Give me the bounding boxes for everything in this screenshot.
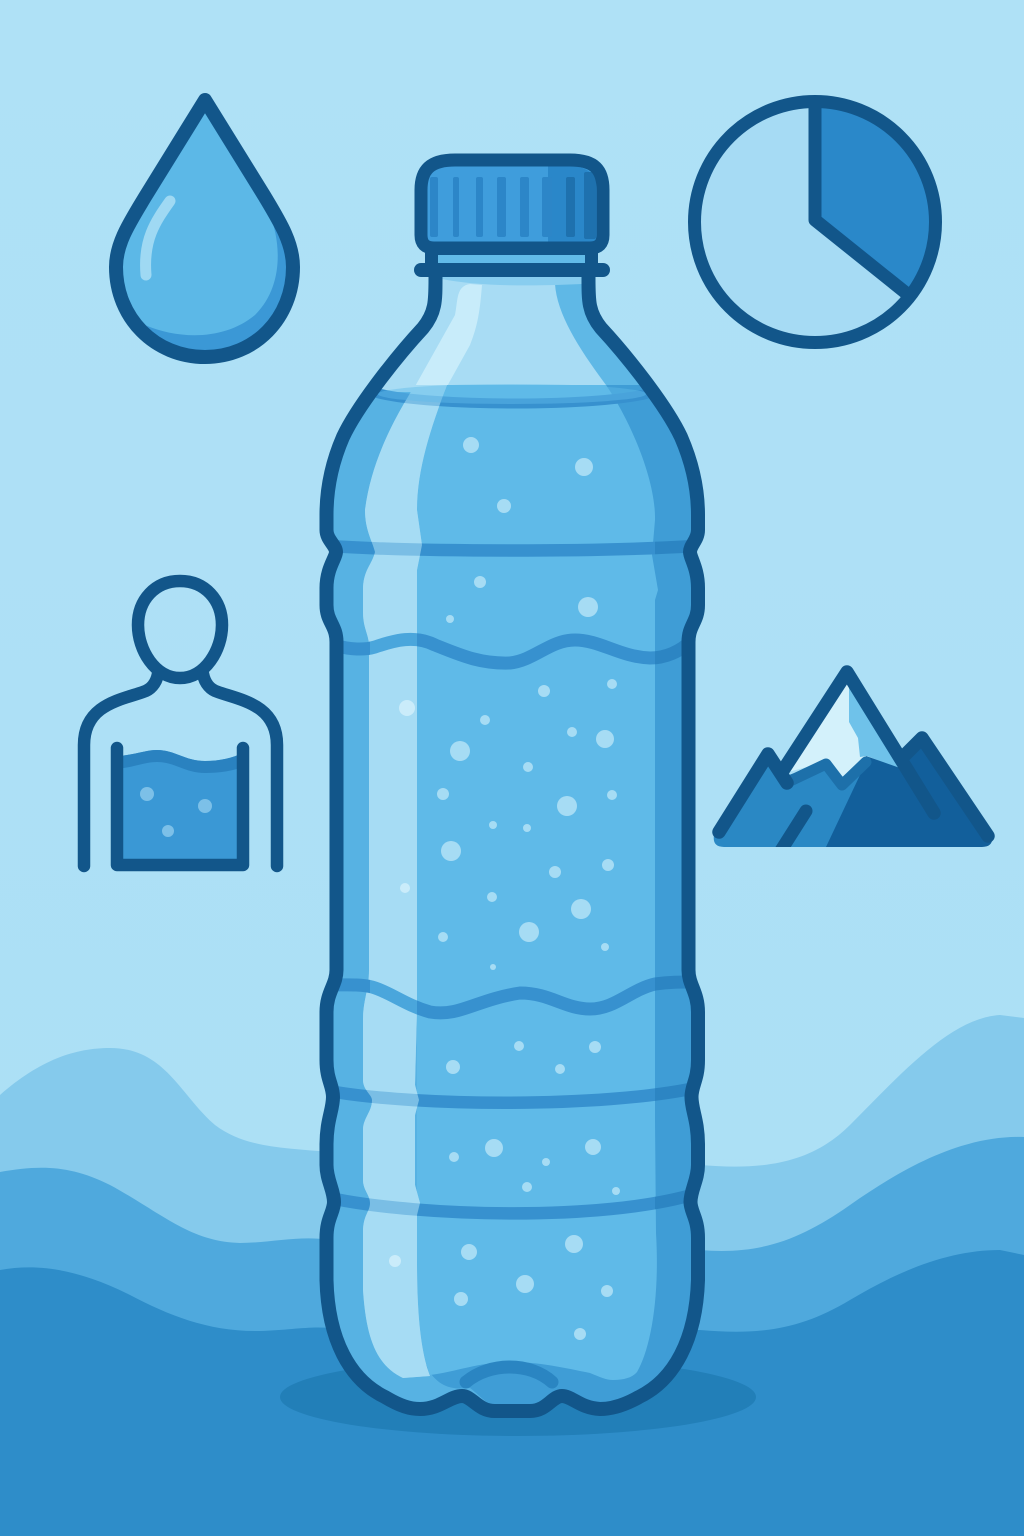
background wave: light xyxy=(0,1015,1024,1536)
bottle cap xyxy=(421,160,603,248)
ribs xyxy=(330,393,695,1213)
rib highlight overlay xyxy=(363,385,447,1378)
icon: mountain xyxy=(714,672,992,852)
bottle shadow xyxy=(280,1358,756,1436)
bottle outline xyxy=(326,276,698,1411)
water waves xyxy=(332,639,692,1013)
icon: person with water level xyxy=(84,581,277,866)
water surface xyxy=(378,384,646,404)
icon: pie chart xyxy=(694,101,936,342)
left light band xyxy=(363,385,447,1378)
base dimple xyxy=(466,1367,552,1382)
neck band xyxy=(425,248,598,270)
neck ring xyxy=(414,263,610,277)
bottle body and water xyxy=(334,277,691,1404)
background wave: medium xyxy=(0,1137,1024,1536)
background wave: dark xyxy=(0,1250,1024,1536)
bubbles xyxy=(389,437,620,1340)
bottle xyxy=(320,160,720,1422)
right shaded band xyxy=(426,385,691,1404)
icon: water drop xyxy=(116,100,300,365)
neck highlight xyxy=(413,284,482,390)
center water column xyxy=(417,385,658,1380)
